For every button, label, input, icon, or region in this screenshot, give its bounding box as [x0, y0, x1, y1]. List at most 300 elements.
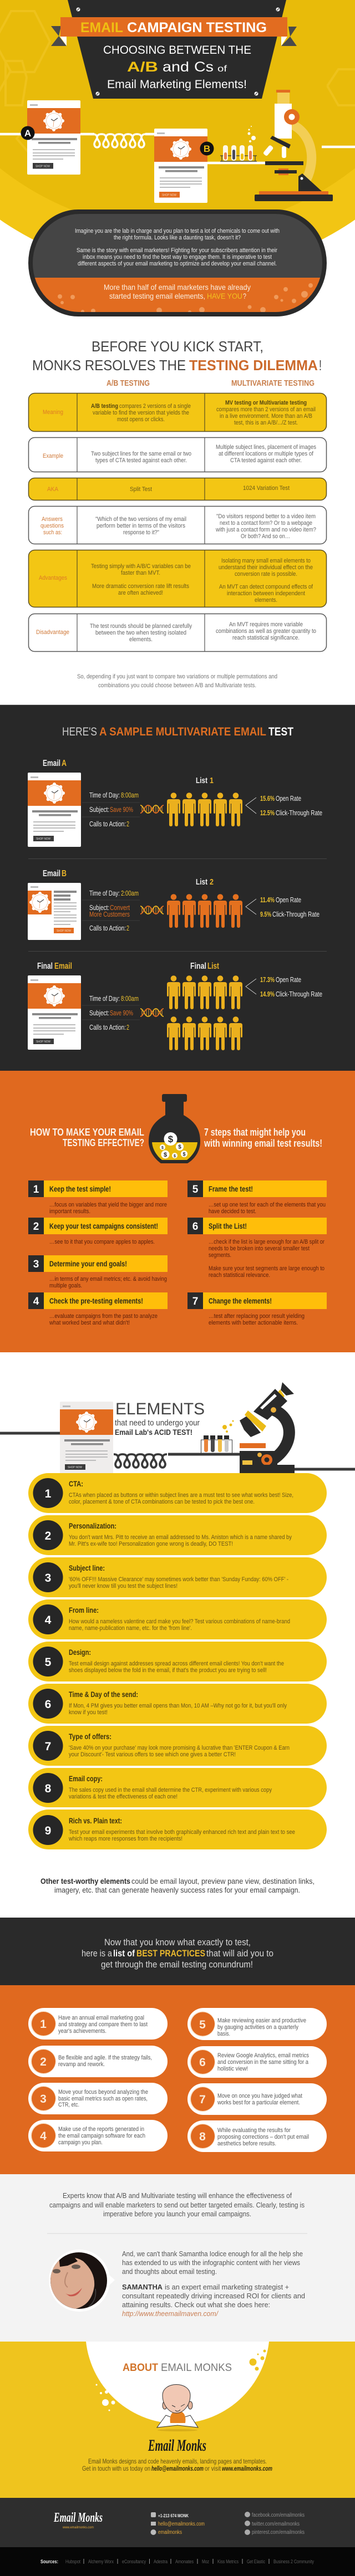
element 7: type of offers: Type of offers:: [69, 1732, 111, 1741]
step 3: 3: [33, 1259, 39, 1270]
element 7: type of offers: 7: [45, 1740, 51, 1753]
panel: best practices banner: BEST PRACTICES: [136, 1948, 205, 1959]
element 4: from line: name, name-publication name, etc. for the 'from line'.: [69, 1625, 192, 1632]
heading: testing dilemma: [32, 338, 322, 374]
row: answers questions: next to a contact form? Or to a webpage: [220, 520, 312, 527]
row: advantages: Advantages: [39, 575, 67, 581]
row: meaning: [29, 393, 326, 431]
icon: dna: [140, 1009, 164, 1016]
practice 3: [28, 2083, 168, 2114]
text: about description: Get in touch with us today on: [82, 2465, 150, 2472]
heading right: 7 steps that might help you: [204, 1127, 306, 1138]
element 1: CTA: [28, 1473, 327, 1513]
final list results: [246, 976, 322, 998]
panel: sources: Sources:: [40, 2559, 58, 2565]
practice 7: Move on once you have judged what: [217, 2093, 302, 2099]
panel: footer contact: [0, 2498, 355, 2547]
email mock grey: [60, 1402, 113, 1476]
icon: flask with coins: $: [164, 1152, 167, 1158]
practice 3: Move your focus beyond analyzing the: [58, 2089, 148, 2095]
element 9: rich vs plain: [28, 1810, 327, 1849]
ribbon: [51, 17, 297, 46]
practice 5: 5: [199, 2018, 206, 2031]
row: disadvantage: [29, 614, 326, 652]
row: advantages: elements.: [255, 597, 277, 604]
text: about description: [82, 2457, 272, 2472]
connector line: [0, 134, 355, 163]
panel: best practices banner: that will aid you to: [206, 1948, 273, 1959]
icon: flask with coins: $: [168, 1134, 174, 1144]
footer logo: [53, 2511, 103, 2529]
text: about description: Email Monks designs and code heavenly emails, landing pages and templates.: [88, 2457, 267, 2465]
row: meaning: compares 2 versions of a single: [119, 403, 191, 410]
email B title: B: [62, 869, 67, 878]
list 2 title: List: [196, 877, 207, 887]
step 5: have decided to test.: [209, 1208, 256, 1215]
text: about description: or visit: [205, 2465, 221, 2472]
panel: element list: [28, 1473, 327, 1849]
step 3: …in terms of any email metrics; etc. & avoid having: [49, 1276, 167, 1282]
step 4: [28, 1292, 168, 1326]
row: meaning: MV testing or Multivariate testing: [225, 400, 307, 406]
element 9: rich vs plain: which reaps more responses from the recipients!: [68, 1836, 182, 1842]
practice 1: 1: [40, 2018, 47, 2031]
email B variables: Convert: [110, 904, 130, 912]
element 9: rich vs plain: 9: [45, 1824, 51, 1837]
table column headings: MULTIVARIATE TESTING: [231, 379, 315, 388]
heading: about email monks: ABOUT: [123, 2362, 158, 2374]
element 2: personalization: Mr. Pitt's ex-wife too! Personalization gone wrong is deadly, DO TEST!: [69, 1541, 233, 1547]
subtitle: A/B: [127, 59, 158, 75]
final list title: Final: [190, 962, 206, 971]
step 6: segments.: [209, 1252, 231, 1259]
icon: dark microscope: [240, 1382, 295, 1474]
icon: dna: [140, 906, 164, 914]
icon: microscope: [255, 90, 333, 201]
heading: sample test: TEST: [268, 725, 293, 738]
step 4: 4: [33, 1296, 39, 1307]
row: advantages: understand their individual effect on the: [219, 564, 313, 571]
step 3: multiple goals.: [49, 1282, 82, 1289]
heading: testing dilemma: TESTING DILEMMA: [189, 357, 318, 374]
row: aka: Split Test: [130, 486, 152, 493]
row: advantages: faster than MVT.: [121, 570, 160, 576]
step 6: 6: [192, 1221, 198, 1233]
panel: sources: Hubspot: [65, 2559, 80, 2564]
text: conclusion of comparison: So, depending if you just want to compare two variations or multiple permutations and: [77, 673, 277, 680]
social links: facebook.com/emailmonks: [252, 2512, 305, 2518]
element 1: CTA: 1: [45, 1488, 52, 1500]
table column headings: A/B TESTING: [106, 379, 150, 388]
intro text: [75, 228, 280, 267]
practice 3: CTR, etc.: [58, 2102, 79, 2108]
step 7: …test after replacing poor result yielding: [209, 1313, 305, 1320]
table column headings: [106, 379, 315, 388]
row: answers questions: response to it?": [123, 529, 159, 536]
list 1 results: 15.6%: [260, 795, 275, 803]
list 2 results: 11.4%: [260, 896, 275, 904]
element 8: email copy: variations & test the effectiveness of each one!: [69, 1793, 178, 1800]
email B variables: 2: [126, 924, 129, 932]
step 1: Keep the test simple!: [49, 1184, 111, 1193]
practice 1: [28, 2008, 168, 2040]
heading: email campaign testing: CAMPAIGN TESTING: [127, 20, 267, 35]
panel: sources: [0, 2547, 355, 2576]
element 3: subject line: [28, 1557, 327, 1597]
step 1: …focus on variables that yield the bigger and more: [49, 1202, 167, 1208]
email B variables: 2:00am: [121, 890, 139, 897]
icon: list 2 people: [167, 894, 242, 928]
panel: sources: Amonates: [175, 2559, 194, 2564]
icon: flask with coins: $: [174, 1154, 176, 1158]
practice 8: [187, 2120, 327, 2152]
row: example: at different locations or multiple types of: [219, 451, 314, 457]
text: other test-worthy elements: Other test-worthy elements: [40, 1877, 130, 1885]
row: advantages: conversion rate is possible.: [235, 571, 297, 577]
practice 8: While evaluating the results for: [217, 2127, 291, 2134]
text: experts know: campaigns and will enable marketers to send out better targeted emails. Clearly, testing is: [49, 2201, 305, 2209]
row: disadvantage: reach statistical significance.: [232, 635, 300, 641]
photo: Samantha: [49, 2250, 115, 2312]
icon: flask with coins: [149, 1094, 200, 1163]
row: advantages: More dramatic conversion rate lift results: [92, 583, 189, 590]
subtitle: of: [217, 64, 227, 74]
text: thanks: attaining results. Check out what she does here:: [122, 2301, 270, 2309]
element 3: subject line: '60% OFF!!! Massive Clearance' may sometimes work better than 'Sunday Funday: 60% OFF' -: [69, 1576, 288, 1583]
subtitle: Email Marketing Elements!: [107, 78, 247, 91]
row: answers questions: Or both? And so on…: [241, 533, 290, 540]
email mock B: [154, 129, 207, 203]
row: meaning: most opens or clicks.: [117, 416, 165, 423]
list 2 results: Open Rate: [276, 896, 301, 904]
intro text: the right formula. Looks like a daunting task, doesn't it?: [114, 234, 241, 241]
row: aka: 1024 Variation Test: [243, 485, 290, 492]
step 6: Split the List!: [209, 1221, 247, 1230]
final email variables: Calls to Action:: [89, 1024, 126, 1031]
icon: test tubes: [220, 126, 257, 161]
email mock A: [27, 100, 80, 175]
element 9: rich vs plain: Test your email experiments that involve both graphically enhanced rich text and plain text to see: [69, 1829, 295, 1836]
social links: twitter.com/emailmonks: [252, 2521, 300, 2527]
text: thanks: is an expert email marketing strategist +: [165, 2283, 289, 2291]
email B block: [28, 869, 320, 940]
step 4: …evaluate campaigns from the past to analyze: [49, 1313, 158, 1320]
row: disadvantage: elements.: [129, 636, 153, 643]
contact details: emailmonks: [158, 2529, 182, 2536]
practice 5: by gauging activities on a quarterly: [217, 2024, 298, 2031]
practice 5: [187, 2008, 327, 2040]
text: experts know: imperative before you launch your email campaigns.: [103, 2210, 251, 2218]
email B variables: [82, 890, 140, 932]
row: example: [29, 438, 326, 472]
panel: sources: Get Elastic: [247, 2559, 265, 2564]
social links: pinterest.com/emailmonks: [252, 2529, 305, 2536]
contact details: +1-213 674 MONK: [158, 2513, 189, 2518]
intro text: different aspects of your email marketing to optimize and develop your email channel.: [78, 260, 277, 267]
element 6: time and day: If Mon, 4 PM gives you better email opens than Mon, 10 AM –Why not go for it, but you'll only: [69, 1703, 287, 1709]
element 4: from line: 4: [45, 1614, 52, 1627]
final email title: [37, 962, 72, 971]
email mock A: SHOP NOW: [36, 165, 50, 168]
list 2 results: Click-Through Rate: [272, 911, 320, 918]
row: disadvantage: between the two when testing isolated: [95, 630, 186, 636]
text: other test-worthy elements: [40, 1877, 315, 1894]
panel: best practices banner: get through the email testing conundrum!: [101, 1959, 253, 1970]
list 1 results: 12.5%: [260, 809, 275, 817]
row: advantages: An MVT can detect compound effects of: [219, 584, 313, 590]
step 2: 2: [33, 1221, 39, 1233]
row: advantages: interaction between independent: [227, 590, 305, 597]
heading left: HOW TO MAKE YOUR EMAIL: [30, 1127, 144, 1138]
step 6: …check if the list is large enough for an A/B split or: [209, 1239, 324, 1245]
panel: best practices banner: list of: [113, 1948, 135, 1959]
element 2: personalization: [28, 1515, 327, 1555]
final email mock: [28, 975, 81, 1050]
text: thanks: SAMANTHA: [122, 2283, 163, 2291]
email A variables: Subject:: [89, 806, 109, 814]
heading: elements: that need to undergo your: [115, 1418, 200, 1428]
row: answers questions: questions: [40, 523, 64, 529]
text: conclusion of comparison: combinations you could choose between A/B and Multivariate tests.: [98, 682, 256, 689]
text: conclusion of comparison: [77, 673, 277, 689]
final email title: Final: [37, 962, 53, 971]
row: advantages: Isolating many small email elements to: [221, 558, 311, 564]
subtitle: CHOOSING BETWEEN THE: [103, 44, 251, 57]
final list results: Open Rate: [276, 976, 301, 984]
badge B: [200, 142, 214, 155]
icon: flask with coins: $: [182, 1152, 186, 1157]
email A mock: SHOP NOW: [36, 837, 51, 841]
heading: elements: Email Lab's ACID TEST!: [115, 1428, 192, 1437]
heading left: [30, 1127, 144, 1148]
footer logo: www.emailmonks.com: [62, 2526, 94, 2529]
step 2: …see to it that you compare apples to apples.: [49, 1239, 155, 1245]
heading: testing dilemma: MONKS RESOLVES THE: [32, 357, 186, 374]
callout: have you: ?: [243, 292, 246, 300]
email B variables: Subject:: [89, 904, 109, 912]
step 5: 5: [192, 1184, 199, 1195]
element 1: CTA: color, placement & tone of CTA combinations can be tested to pick the best one.: [69, 1499, 255, 1505]
callout: have you: More than half of email marketers have already: [104, 283, 251, 292]
step 3: Determine your end goals!: [49, 1259, 127, 1268]
panel: sources: Adestra: [154, 2559, 168, 2564]
email B mock: SHOP NOW: [57, 929, 72, 933]
email A title: Email: [43, 759, 60, 768]
icon: monk on paper: [157, 2384, 198, 2431]
final list title: List: [207, 962, 219, 971]
practice 7: [187, 2083, 327, 2115]
intro text: Imagine you are the lab in charge and you plan to test a lot of chemicals to come out with: [75, 228, 280, 234]
text: about description: www.emailmonks.com: [222, 2465, 272, 2472]
element 4: from line: [28, 1599, 327, 1639]
row: example: types of CTA tested against each other.: [95, 457, 187, 464]
element 5: design: Design:: [69, 1648, 91, 1657]
element 8: email copy: 8: [45, 1782, 52, 1795]
row: disadvantage: combinations as well as greater quantity to: [216, 628, 316, 635]
element 6: time and day: Time & Day of the send:: [69, 1690, 138, 1699]
intro text: inbox means you need to find the best way to engage them. It is imperative to test: [83, 254, 272, 260]
email A variables: Save 90%: [110, 806, 133, 814]
practice 4: Make use of the reports generated in: [58, 2126, 144, 2133]
element 3: subject line: 3: [45, 1572, 51, 1585]
row: meaning: in a live environment. More than an A/B: [220, 413, 312, 420]
final email title: Email: [54, 962, 72, 971]
final email variables: Time of Day:: [89, 995, 120, 1003]
email A block: [28, 759, 322, 847]
practice 2: [28, 2046, 168, 2077]
icon: final list people: [167, 975, 242, 1050]
final email block: [28, 962, 322, 1050]
element 4: from line: From line:: [69, 1606, 99, 1614]
panel: best practices banner: here is a: [82, 1948, 112, 1959]
email B mock: [28, 883, 81, 940]
practice 4: [28, 2120, 168, 2151]
email A variables: 8:00am: [121, 791, 139, 799]
row: example: CTA tested against each other.: [230, 457, 302, 464]
practice 6: Review Google Analytics, email metrics: [217, 2052, 309, 2059]
comparison table: [29, 393, 326, 652]
practice 4: the email campaign software for each: [58, 2133, 145, 2139]
step 2: [28, 1218, 168, 1245]
icon: dark test tubes: [201, 1420, 234, 1453]
step 6: reach statistical relevance.: [209, 1272, 270, 1279]
element 8: email copy: The sales copy used in the email shall determine the CTR, experiment with various copy: [69, 1787, 272, 1793]
heading: about email monks: EMAIL MONKS: [161, 2362, 232, 2374]
practice 4: 4: [40, 2130, 47, 2143]
panel: best practices banner: [0, 1918, 355, 1985]
element 8: email copy: [28, 1768, 327, 1807]
row: meaning: Meaning: [43, 409, 63, 416]
element 5: design: 5: [45, 1656, 52, 1669]
row: aka: AKA: [47, 486, 59, 493]
final list results: 14.9%: [260, 990, 275, 998]
practice 2: revamp and rework.: [58, 2061, 105, 2068]
heading: elements: [115, 1400, 205, 1437]
panel: sources: eConsultancy: [122, 2559, 146, 2564]
element 7: type of offers: your Discount'- Test various offers to see which one gives a better CTR!: [69, 1751, 236, 1758]
final email variables: Subject:: [89, 1009, 109, 1017]
step 5: [187, 1180, 327, 1215]
badge A: [21, 126, 34, 140]
practice 7: 7: [199, 2093, 206, 2106]
row: example: Multiple subject lines, placement of images: [216, 444, 316, 451]
email A title: A: [62, 759, 67, 768]
email B variables: More Customers: [89, 911, 130, 918]
practice 6: and conversion in the same sitting for a: [217, 2059, 309, 2066]
email A variables: [82, 791, 140, 828]
email mock B: SHOP NOW: [162, 194, 177, 197]
panel: best practices banner: Now that you know what exactly to test,: [104, 1937, 251, 1948]
final email variables: 2: [126, 1024, 129, 1031]
subtitle: Cs: [194, 59, 214, 75]
heading: testing dilemma: !: [319, 357, 322, 374]
step 7: Change the elements!: [209, 1296, 272, 1305]
email A mock: [28, 773, 81, 847]
heading: sample test: A SAMPLE MULTIVARIATE EMAIL: [99, 725, 266, 738]
subtitle: [103, 44, 251, 91]
element 3: subject line: Subject line:: [69, 1563, 105, 1572]
step 3: [28, 1255, 168, 1289]
element 4: from line: How would a nameless valentine card make you feel? Test various combinations of name-brand: [69, 1618, 290, 1625]
email A variables: Calls to Action:: [89, 820, 126, 828]
practice 1: and strategy and compare them to last: [58, 2021, 148, 2028]
row: example: Two subject lines for the same email or two: [91, 451, 191, 457]
panel: best practices list: [0, 1985, 355, 2174]
practice 3: basic email metrics such as open rates,: [58, 2095, 148, 2102]
panel: sources: Alchemy Worx: [88, 2559, 114, 2564]
panel: how to make testing effective: [0, 1071, 355, 1352]
list 1 title: List: [196, 776, 207, 785]
element 7: type of offers: 'Save 40% on your purchase' may look more promising & lucrative than 'ENTER Coupon & Earn: [69, 1745, 290, 1751]
practice 6: holistic view!: [217, 2066, 248, 2072]
step 6: needs to be broken into several smaller test: [209, 1245, 310, 1252]
heading: elements: ELEMENTS: [115, 1400, 205, 1418]
practice 6: 6: [199, 2056, 206, 2069]
element 6: time and day: 6: [45, 1698, 51, 1711]
row: answers questions: [29, 507, 326, 544]
step 7: 7: [192, 1296, 198, 1307]
row: advantages: Testing simply with A/B/C variables can be: [91, 563, 191, 570]
panel: sample multivariate test: [0, 704, 355, 1071]
list 2 results: 9.5%: [260, 911, 271, 918]
text: thanks: And, we can't thank Samantha Iodice enough for all the help she: [122, 2250, 303, 2258]
practice 7: works best for a particular element.: [217, 2099, 300, 2106]
heading: testing dilemma: BEFORE YOU KICK START,: [92, 338, 263, 355]
final list results: 17.3%: [260, 976, 275, 984]
element 5: design: shoes displayed below the fold in the email, if that's the product you are trying to sell!: [69, 1667, 267, 1674]
practice 8: 8: [199, 2130, 206, 2143]
element 2: personalization: Personalization:: [69, 1521, 116, 1530]
text: thanks: has extended to us with the infographic content with her views: [122, 2258, 300, 2267]
text: other test-worthy elements: could be email layout, preview pane view, destination links,: [131, 1877, 315, 1885]
row: answers questions: "Do visitors respond better to a video item: [216, 513, 316, 520]
final email variables: 8:00am: [121, 995, 139, 1003]
heading: sample test: HERE'S: [62, 725, 97, 738]
text: experts know: [49, 2191, 305, 2218]
element 3: subject line: you'll never know till you test the subject lines!: [69, 1583, 178, 1589]
intro text: Same is the story with email marketers! Fighting for your subscribers attention in their: [77, 247, 277, 254]
text: thanks: and thoughts about email testing.: [122, 2267, 217, 2276]
element 6: time and day: know if you test!: [69, 1709, 108, 1716]
row: meaning: test, this is an A/B/.../Z test.: [234, 420, 298, 426]
list 1 results: Click-Through Rate: [276, 809, 322, 817]
element 2: personalization: You don't want Mrs. Pitt to receive an email addressed to Ms. Aniston which is a name shared by: [69, 1534, 292, 1541]
step 1: important results.: [49, 1208, 90, 1215]
icon: dark coil: [114, 1454, 167, 1468]
practice 8: aesthetics before results.: [217, 2140, 276, 2147]
final email mock: SHOP NOW: [36, 1040, 51, 1044]
subtitle: and: [163, 59, 189, 75]
social links: [245, 2512, 305, 2536]
element 5: design: Test email design against addresses spread across different email clients! You don't want the: [69, 1660, 284, 1667]
final email variables: [82, 995, 140, 1031]
practice 8: proposing corrections – don't put email: [217, 2134, 309, 2140]
step 7: elements with better actionable items.: [209, 1320, 298, 1326]
row: answers questions: with just a contact form and no video item?: [215, 527, 316, 533]
step 4: what worked best and what didn't!: [49, 1320, 130, 1326]
email A variables: 2: [126, 820, 129, 828]
email B title: Email: [43, 869, 60, 878]
text: thanks: [122, 2250, 305, 2318]
badge B: B: [204, 144, 210, 154]
row: disadvantage: An MVT requires more variable: [229, 621, 303, 628]
panel: sources: Moz: [202, 2559, 209, 2564]
list 1 results: Open Rate: [276, 795, 301, 803]
final list results: Click-Through Rate: [276, 990, 322, 998]
heading: about email monks: [123, 2362, 232, 2374]
heading right: with winning email test results!: [204, 1138, 322, 1149]
step 5: Frame the test!: [209, 1184, 253, 1193]
